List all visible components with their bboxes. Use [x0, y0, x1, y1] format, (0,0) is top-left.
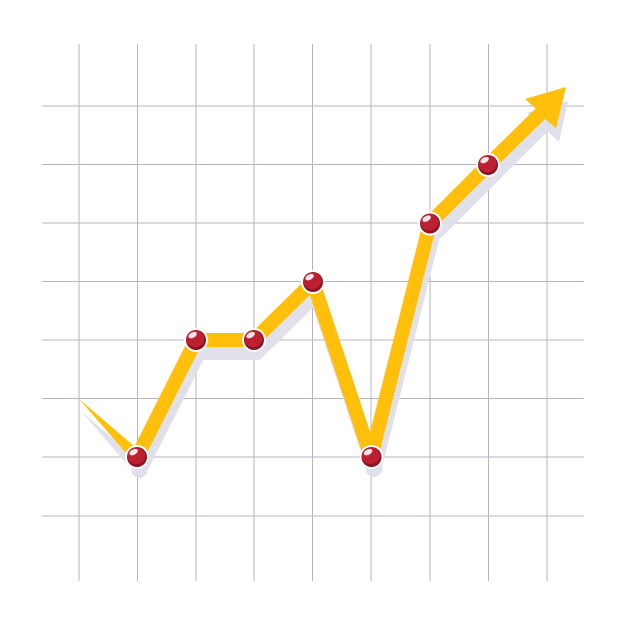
marker 2 — [184, 328, 208, 352]
line shadow — [82, 101, 568, 478]
marker 1 — [125, 445, 149, 469]
marker 7 — [476, 153, 500, 177]
marker 3 — [242, 328, 266, 352]
chart grid — [42, 44, 584, 581]
tapered line start — [79, 399, 134, 454]
line segments — [137, 113, 541, 457]
marker 5 — [360, 445, 384, 469]
marker 6 — [418, 212, 442, 236]
data point markers — [125, 153, 500, 469]
yellow trend line with arrow — [79, 87, 566, 457]
marker 4 — [301, 270, 325, 294]
arrow head — [525, 87, 566, 128]
